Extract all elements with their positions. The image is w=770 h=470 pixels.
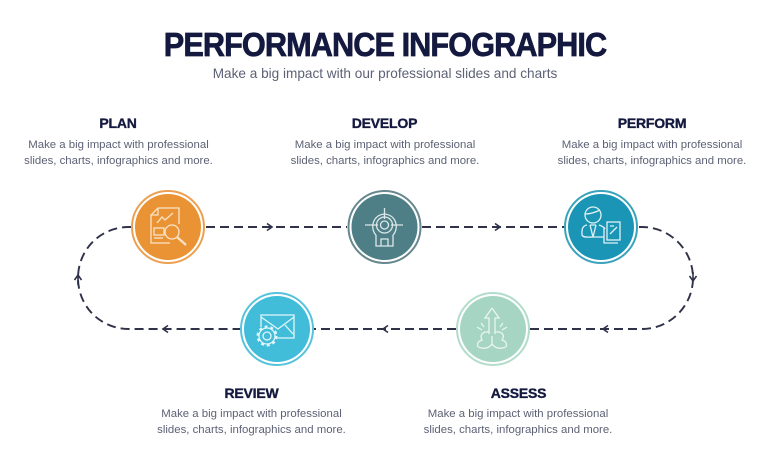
icon: person with document [582,207,620,243]
heading: review: REVIEW [224,385,279,401]
icon: envelope with gear [258,315,294,346]
text: plan [24,139,213,166]
title: PERFORMANCE INFOGRAPHIC [164,26,606,63]
text: perform: slides, charts, infographics and more. [558,154,746,166]
text: perform: Make a big impact with professional [562,139,742,151]
heading: assess: ASSESS [491,385,546,401]
text: plan: Make a big impact with professional [28,139,209,151]
heading: perform: PERFORM [618,115,686,131]
step circle: develop [348,191,420,263]
heading: develop: DEVELOP [352,115,417,131]
subtitle: Make a big impact with our professional slides and charts [213,66,557,81]
text: plan: slides, charts, infographics and more. [24,154,213,166]
text: assess: slides, charts, infographics and more. [424,424,612,436]
step circle: perform [565,191,637,263]
step circle: plan [132,191,204,263]
text: develop: Make a big impact with professional [295,139,475,151]
text: review: Make a big impact with professional [161,408,342,420]
arrowheads [74,224,696,332]
text: develop [291,139,479,166]
step circle: review [241,293,313,365]
icon: brain with arrow [477,308,507,348]
dashed connector path [78,227,693,329]
text: assess: Make a big impact with professional [428,408,608,420]
heading: plan: PLAN [99,115,137,131]
icon: report with magnifier [151,208,186,245]
step circle: assess [457,293,529,365]
text: develop: slides, charts, infographics and more. [291,154,479,166]
text: review [157,408,346,436]
text: perform [558,139,746,166]
text: assess [424,408,612,436]
icon: target on person [365,208,403,246]
text: review: slides, charts, infographics and more. [157,424,346,436]
